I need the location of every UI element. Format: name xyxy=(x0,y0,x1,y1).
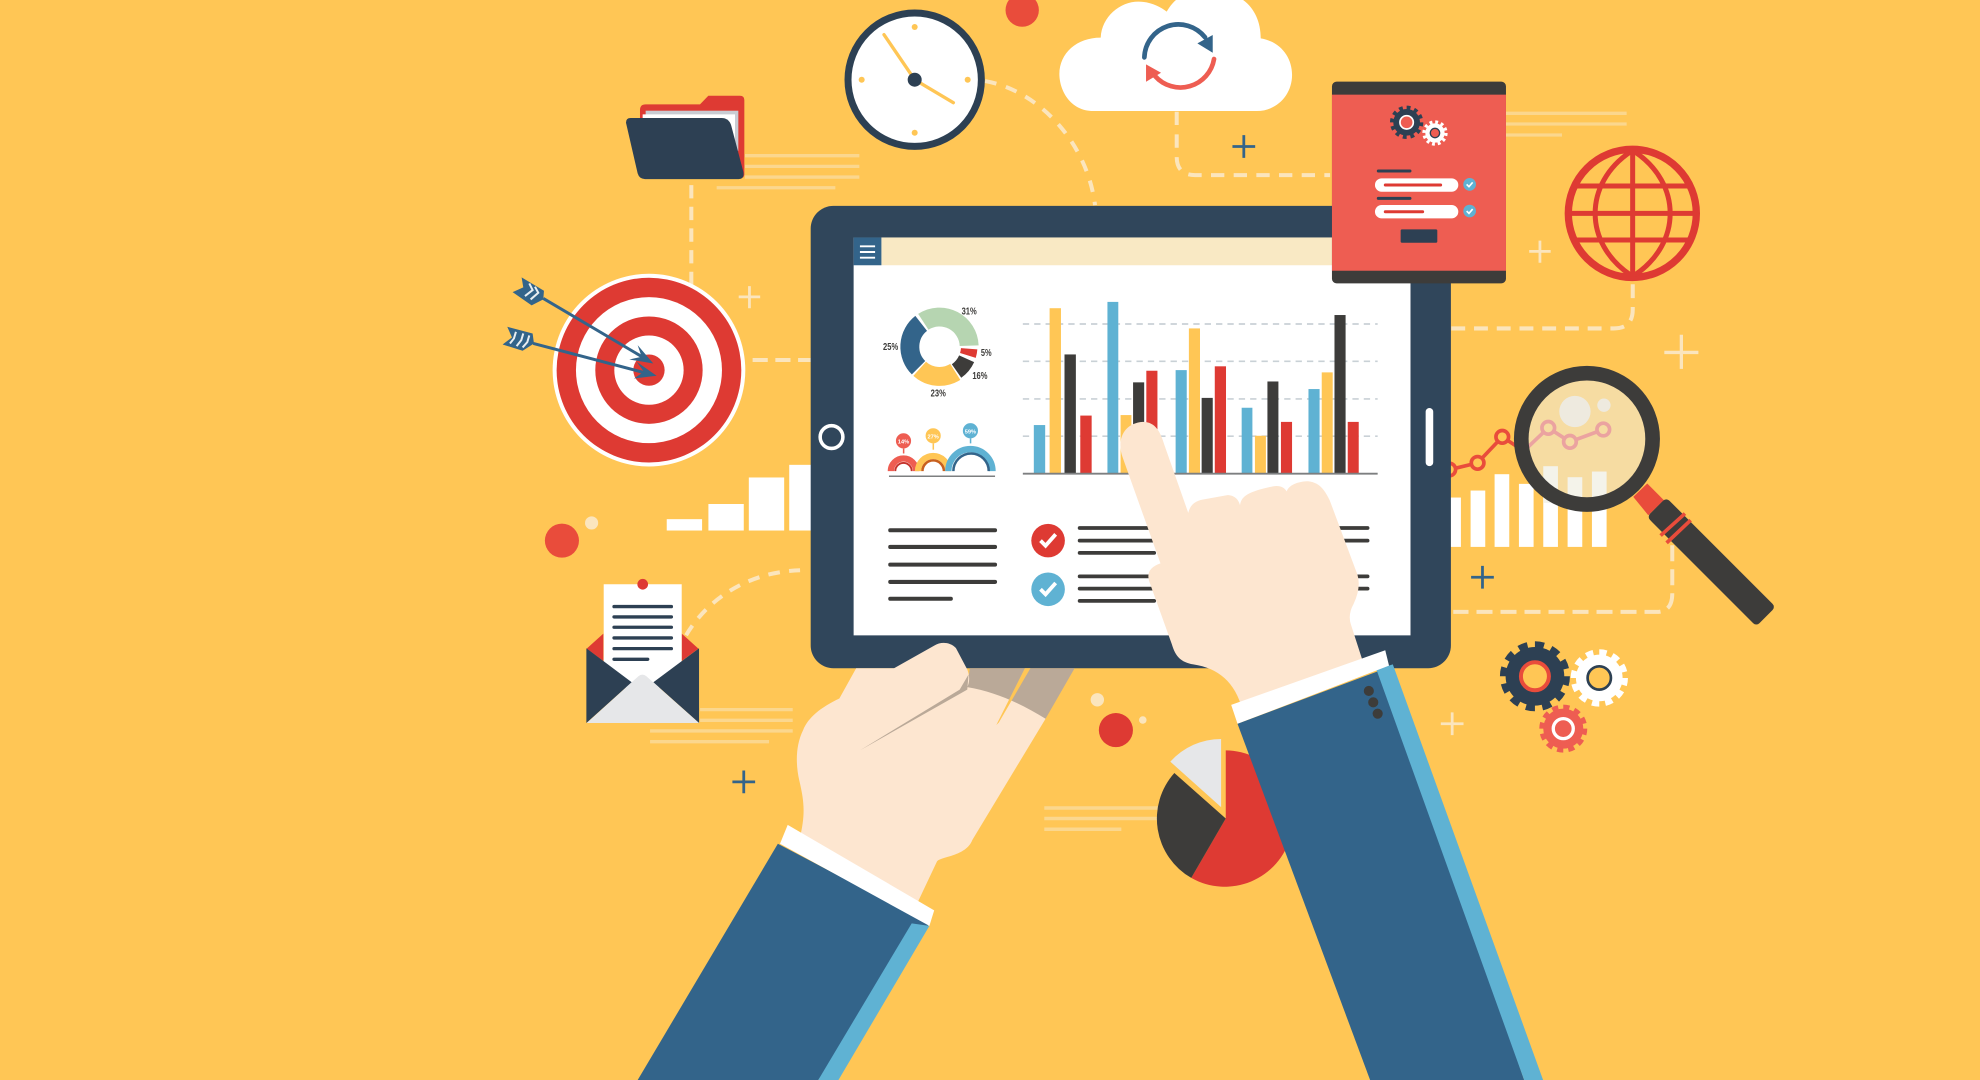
decorative red dot top xyxy=(1006,0,1039,27)
dashed connector: clock to tablet xyxy=(985,81,1095,205)
tablet xyxy=(811,206,1451,668)
bar chart xyxy=(1023,302,1378,474)
donut labels: 25% xyxy=(883,342,898,353)
home button xyxy=(820,426,843,448)
donut chart xyxy=(883,307,992,400)
right sleeve xyxy=(1231,650,1543,1080)
donut labels: 5% xyxy=(981,348,992,359)
arch pins and labels: 59% xyxy=(965,429,976,435)
dashed connector: envelope to tablet xyxy=(686,570,800,635)
left sleeve xyxy=(638,825,934,1080)
donut labels: 23% xyxy=(931,389,946,400)
pie side text lines xyxy=(1044,808,1168,829)
dashed connector: magnifier to tablet xyxy=(1453,545,1672,612)
icon: target with arrows xyxy=(503,274,745,467)
donut labels: 31% xyxy=(962,307,977,318)
folder text lines xyxy=(717,156,859,188)
icon: envelope with letter xyxy=(586,579,699,723)
arch pins and labels xyxy=(896,423,978,453)
form fields xyxy=(1375,171,1476,218)
panel side text lines xyxy=(1506,113,1627,135)
dashed connector: cloud to panel xyxy=(1177,112,1330,175)
plus signs xyxy=(732,135,1698,793)
side button xyxy=(1426,408,1433,466)
arch pins and labels: 14% xyxy=(898,439,909,445)
left hand holding tablet xyxy=(797,643,1075,907)
menu icon xyxy=(854,237,881,265)
panel gears xyxy=(1392,108,1446,144)
decorative dots bottom xyxy=(1091,693,1147,747)
icon: folder xyxy=(626,96,744,179)
icon: globe xyxy=(1568,149,1697,277)
dashed connector: target to tablet xyxy=(753,358,811,362)
form panel xyxy=(1332,82,1506,283)
dashed connector: globe to tablet xyxy=(1451,284,1633,328)
icon: cloud sync xyxy=(1059,0,1292,111)
donut labels: 16% xyxy=(972,371,987,382)
pie chart xyxy=(1157,739,1293,887)
icon: magnifying glass xyxy=(1521,373,1776,626)
right hand pointing at screen xyxy=(1120,422,1364,710)
icon: gears xyxy=(1504,645,1625,750)
checklist xyxy=(1031,524,1368,606)
bars beside target xyxy=(667,465,814,531)
dashed connector: folder and target xyxy=(685,185,697,287)
icon: clock xyxy=(848,13,981,146)
arch pins and labels: 27% xyxy=(927,434,939,440)
text block lines xyxy=(890,530,995,599)
arch chart xyxy=(889,423,995,476)
decorative dots left xyxy=(545,516,598,558)
donut labels xyxy=(883,307,992,400)
line and bar chart behind magnifier xyxy=(1443,431,1607,547)
envelope text lines xyxy=(650,710,793,742)
screen top bar xyxy=(881,237,1410,265)
form button xyxy=(1401,229,1437,243)
